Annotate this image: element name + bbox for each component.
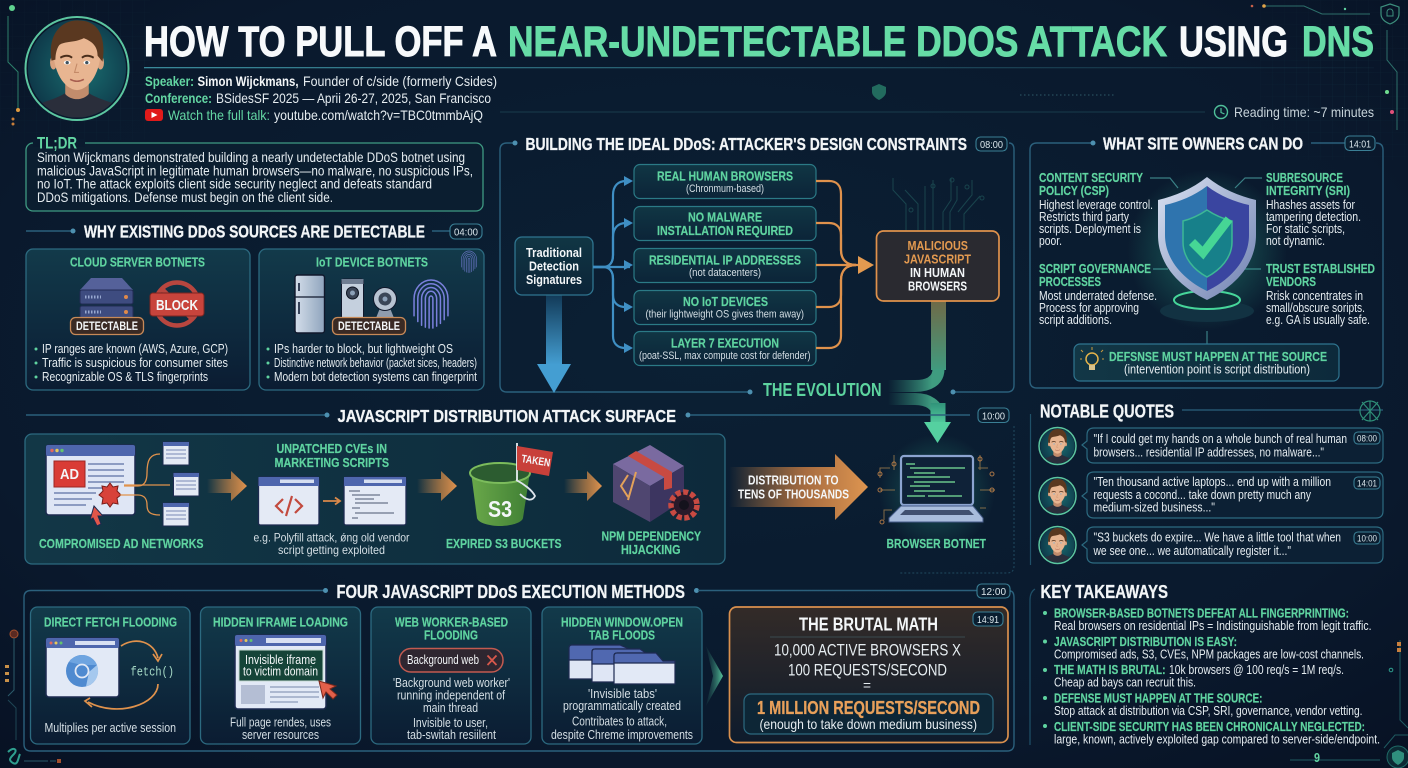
bullet list <box>266 342 477 384</box>
panel: IoT device botnets: IoT DEVICE BOTNETS <box>316 254 428 270</box>
item: SRI: For static scripts, <box>1266 222 1345 236</box>
icon: webcam <box>374 288 396 318</box>
item: script governance: PROCESSES <box>1039 274 1101 289</box>
fetch call label: fetch() <box>130 664 174 680</box>
panel: the brutal math: = <box>863 677 871 693</box>
item: CSP: scripts. Deployment is <box>1039 222 1141 236</box>
icon: quotes badge <box>1360 401 1380 421</box>
card: web worker-based flooding: tab-switah resiilent <box>407 728 496 742</box>
label: unpatched CVEs: UNPATCHED CVEs IN <box>276 441 387 456</box>
heading: javascript distribution attack surface <box>26 406 1009 426</box>
box: traditional detection signatures: Traditional <box>526 245 582 260</box>
box: layer 7: (poat-SSL, max compute cost for defender) <box>639 350 810 362</box>
icon: browser with iframe <box>235 635 337 709</box>
item: trust vendors: e.g. GA is usually safe. <box>1266 313 1370 327</box>
box: malicious javascript: IN HUMAN <box>910 265 965 280</box>
speaker avatar <box>26 17 128 120</box>
takeaway 2 <box>1054 634 1364 662</box>
quote 1: 08:00 <box>1357 434 1377 444</box>
takeaway 3: THE MATH IS BRUTAL: <box>1054 662 1166 677</box>
label: unpatched CVEs: MARKETING SCRIPTS <box>274 455 389 470</box>
panel: cloud server botnets <box>26 249 250 390</box>
item: SRI: tampering detection. <box>1266 210 1361 224</box>
speaker info: Watch the full talk: <box>168 107 270 123</box>
box: traditional detection signatures <box>515 237 593 295</box>
quote 2: "Ten thousand active laptops... end up with a million <box>1094 475 1331 489</box>
speaker info: Conference: <box>145 90 212 106</box>
icon: block sign: BLOCK <box>156 297 198 314</box>
card: hidden window.open tab floods: 'Invisible tabs' <box>588 687 657 701</box>
item: CSP <box>1039 170 1153 248</box>
heading: design constraints: 08:00 <box>980 139 1003 151</box>
box: real human browsers: REAL HUMAN BROWSERS <box>657 168 793 184</box>
decoration: top-right grid <box>1284 24 1404 132</box>
reading time: Reading time: ~7 minutes <box>1234 104 1374 120</box>
decoration: top-left grid <box>24 12 144 120</box>
box: malicious javascript: JAVASCRIPT <box>904 252 971 266</box>
item: CSP: Highest leverage control. <box>1039 198 1153 212</box>
icon: ad browser: AD <box>60 466 79 483</box>
item: SRI: INTEGRITY (SRI) <box>1266 183 1350 198</box>
decoration: header center shield and rules <box>500 84 1205 112</box>
section frame: right edge <box>900 426 1014 573</box>
box: no malware: INSTALLATION REQUIRED <box>657 223 793 238</box>
section frame right side <box>953 143 1014 392</box>
icon: stacked tabs <box>569 645 675 684</box>
card: web worker-based flooding: main thread <box>423 701 478 715</box>
speaker info: youtube.com/watch?v=TBC0tmmbAjQ <box>274 107 483 123</box>
panel: cloud server botnets: CLOUD SERVER BOTNETS <box>70 254 205 270</box>
card: web worker-based flooding: FLOODING <box>424 628 478 642</box>
box: residential IP: RESIDENTIAL IP ADDRESSES <box>649 252 801 268</box>
card: hidden window.open tab floods: TAB FLOODS <box>589 628 655 642</box>
connector lines <box>1150 178 1262 344</box>
icon: S3 bucket <box>470 443 553 526</box>
panel: TL;DR: malicious JavaScript in legitimate human browsers—no malware, no suspicious IPs, <box>37 164 473 178</box>
item: script governance: Process for approving <box>1039 301 1139 315</box>
quote 1: browsers... residential IP addresses, no malware..." <box>1094 446 1324 460</box>
quote 3 <box>1039 526 1383 564</box>
bullet list <box>34 342 228 384</box>
box: malicious javascript <box>876 231 999 301</box>
title underline <box>144 67 1374 68</box>
shield glow <box>1127 170 1287 330</box>
box: real human browsers <box>634 164 816 198</box>
decoration: top-right circuit <box>1251 4 1399 130</box>
label: npm hijacking <box>602 528 701 557</box>
card: hidden window.open tab floods: Contribates to attack, <box>572 714 667 728</box>
panel: what site owners can do <box>1030 134 1383 388</box>
box: malicious javascript: BROWSERS <box>908 278 967 294</box>
panel: notable quotes: NOTABLE QUOTES <box>1040 400 1174 422</box>
arrow: step 2 <box>417 471 457 501</box>
callout: defense at the source: DEFSNSE MUST HAPPEN AT THE SOURCE <box>1109 349 1327 364</box>
icon: browser with iframe: Invisible iframe <box>245 653 316 667</box>
title: USING <box>1179 18 1288 66</box>
callout: defense at the source <box>1074 344 1339 381</box>
speaker info <box>145 73 497 123</box>
callout: defense at the source: (intervention point is script distribution) <box>1124 362 1310 376</box>
panel: TL;DR: no IoT. The attack exploits client side security neglect and defeats standard <box>37 176 432 192</box>
panel: IoT device botnets <box>259 249 484 390</box>
quote 2 <box>1039 472 1383 518</box>
arrow: distribution to tens of thousands: TENS OF THOUSANDS <box>738 486 849 502</box>
panel: attack surface <box>25 434 725 564</box>
item: script governance <box>1039 261 1157 327</box>
icon: browser botnet laptop <box>878 434 995 550</box>
item: SRI: Hhashes assets for <box>1266 198 1355 212</box>
icon: shield <box>1158 177 1256 300</box>
arrow: fetch return <box>85 684 158 709</box>
icon: light bulb <box>1080 347 1104 370</box>
section frame: design constraints <box>500 143 750 392</box>
panel: the brutal math: 14:91 <box>977 614 999 626</box>
takeaway 3 <box>1054 662 1344 690</box>
label: expired S3 buckets: EXPIRED S3 BUCKETS <box>446 536 562 551</box>
quote 3: "S3 buckets do expire... We have a little tool that when <box>1094 530 1341 544</box>
icon: server <box>80 278 133 319</box>
box: no IoT: (their lightweight OS gives them away) <box>646 308 804 320</box>
box: real human browsers: (Chronmum-based) <box>686 183 764 195</box>
arrow: chevron to math <box>706 646 723 706</box>
badge: detectable: DETECTABLE <box>338 321 400 333</box>
panel: what site owners can do: WHAT SITE OWNERS CAN DO <box>1103 134 1303 154</box>
item: script governance: Most underrated defense. <box>1039 289 1157 303</box>
quote 1 <box>1039 428 1383 464</box>
box: residential IP: (not datacenters) <box>689 267 761 279</box>
arrows: orange merges <box>816 181 874 348</box>
item: SRI <box>1266 170 1361 248</box>
item: script governance: SCRIPT GOVERNANCE <box>1039 261 1151 276</box>
icon: smart speaker <box>342 279 364 319</box>
icon: document 1 <box>163 442 189 465</box>
arrow: small <box>323 498 340 504</box>
icon: mini browser script <box>344 477 406 525</box>
card: web worker-based flooding: running independent of <box>397 688 505 702</box>
label: compromised ad networks: COMPROMISED AD NETWORKS <box>39 536 204 551</box>
panel: TL;DR: DDoS mitigations. Defense must begin on the client side. <box>37 190 333 205</box>
panel: key takeaways <box>1030 581 1380 746</box>
background web pill: Background web <box>407 653 479 667</box>
label: polyfill note: script getting exploited <box>278 543 385 557</box>
quote 2: 14:01 <box>1357 478 1377 490</box>
arrow: distribution to tens of thousands: DISTRIBUTION TO <box>748 472 838 488</box>
arrow: step 1 <box>207 471 247 501</box>
item: SRI: not dynamic. <box>1266 234 1325 248</box>
takeaway 3: 10k browsers @ 100 req/s = 1M req/s. <box>1169 663 1344 677</box>
box: no IoT <box>634 290 816 324</box>
box: layer 7 <box>634 332 816 366</box>
panel: the brutal math: THE BRUTAL MATH <box>799 614 938 634</box>
quote 2: requests a cocond... take down pretty much any <box>1094 488 1312 502</box>
label: npm hijacking: HIJACKING <box>621 542 680 557</box>
bullet list: IPs harder to block, but lightweight OS <box>274 342 453 356</box>
card: hidden iframe loading: Full page rendes, uses <box>230 716 331 730</box>
arrow: fetch out <box>121 641 162 661</box>
icon: browser with chrome <box>46 638 119 697</box>
box: no malware: NO MALWARE <box>688 210 762 224</box>
decoration: bottom-right circuit <box>1290 640 1408 768</box>
bullet list: Traffic is suspicious for consumer sites <box>42 356 228 370</box>
item: CSP: poor. <box>1039 234 1062 248</box>
takeaway 3: Cheap ad bays can recruit this. <box>1054 676 1196 690</box>
quote 2: medium-sized business..." <box>1094 500 1215 514</box>
item: trust vendors <box>1266 261 1375 327</box>
result box: (enough to take down medium business) <box>760 716 977 732</box>
panel: key takeaways: KEY TAKEAWAYS <box>1040 581 1168 602</box>
heading: four javascript ddos execution methods: FOUR JAVASCRIPT DDoS EXECUTION METHODS <box>336 582 685 602</box>
badge: detectable <box>332 318 406 334</box>
item: trust vendors: TRUST ESTABLISHED <box>1266 261 1375 276</box>
icon: small fingerprint <box>461 251 477 273</box>
bullet list: Distinctive network behavior (packet sices, headers) <box>274 356 477 370</box>
heading: why existing sources: WHY EXISTING DDoS SOURCES ARE DETECTABLE <box>84 222 425 242</box>
card: direct fetch flooding: DIRECT FETCH FLOODING <box>44 614 177 630</box>
icon: youtube <box>145 109 163 121</box>
icon: browser with iframe: to victim domain <box>243 664 318 678</box>
card: direct fetch flooding: Multiplies per active session <box>44 721 176 735</box>
arrow: distribution to tens of thousands <box>729 454 868 520</box>
heading: javascript distribution attack surface: JAVASCRIPT DISTRIBUTION ATTACK SURFACE <box>338 406 676 426</box>
panel: the brutal math: 10,000 ACTIVE BROWSERS X <box>774 640 961 660</box>
panel: notable quotes <box>1030 400 1383 565</box>
heading: four javascript ddos execution methods: 12:00 <box>981 586 1006 598</box>
title: DNS <box>1302 18 1374 66</box>
heading: design constraints: BUILDING THE IDEAL DDoS: ATTACKER'S DESIGN CONSTRAINTS <box>526 134 967 154</box>
title <box>144 18 1374 66</box>
panel: the brutal math <box>730 607 1008 742</box>
icon: npm box <box>613 445 697 522</box>
label: polyfill note: e.g. Polyfill attack, ǿng old vendor <box>254 530 410 544</box>
item: trust vendors: Rrisk concentrates in <box>1266 289 1363 303</box>
takeaway 2: JAVASCRIPT DISTRIBUTION IS EASY: <box>1054 634 1237 649</box>
result box <box>744 694 993 734</box>
panel: the brutal math: 100 REQUESTS/SECOND <box>788 660 947 680</box>
box: traditional detection signatures: Detection <box>529 258 579 274</box>
decoration: bottom-right circuit: 9 <box>1314 751 1320 765</box>
card: hidden window.open tab floods: despite Chreme improvements <box>551 728 693 742</box>
label: browser botnet: BROWSER BOTNET <box>886 536 986 551</box>
item: trust vendors: small/obscure soripts. <box>1266 301 1365 315</box>
background web pill <box>400 648 503 672</box>
card: hidden window.open tab floods: HIDDEN WINDOW.OPEN <box>561 614 683 630</box>
card: hidden window.open tab floods: programmatically created <box>563 699 681 713</box>
takeaway 1 <box>1054 606 1372 633</box>
item: CSP: Restricts third party <box>1039 210 1130 224</box>
quote 3: 10:00 <box>1357 534 1377 544</box>
icon: document 3 <box>163 503 189 526</box>
item: trust vendors: VENDORS <box>1266 274 1316 289</box>
icon: document 2 <box>174 473 199 496</box>
heading: why existing sources: 04:00 <box>454 226 478 238</box>
card: hidden window.open tab floods <box>542 607 702 744</box>
card: web worker-based flooding: 'Background web worker' <box>393 676 510 690</box>
quote 3: we see one... we automatically register it..." <box>1093 544 1291 558</box>
speaker info: Simon Wijckmans, <box>198 73 298 89</box>
heading: four javascript ddos execution methods <box>24 582 1014 751</box>
box: no malware <box>634 206 816 240</box>
card: hidden iframe loading <box>200 607 360 744</box>
panel: TL;DR <box>26 134 483 211</box>
card: hidden iframe loading: server resources <box>242 728 319 742</box>
heading: javascript distribution attack surface: 10:00 <box>982 410 1005 422</box>
card: direct fetch flooding <box>30 607 190 744</box>
speaker info: BSidesSF 2025 — Aprii 26-27, 2025, San Francisco <box>216 90 491 106</box>
icon: block sign <box>150 282 204 326</box>
speaker info: Speaker: <box>145 73 194 89</box>
result box: 1 MILLION REQUESTS/SECOND <box>757 697 980 718</box>
box: no IoT: NO IoT DEVICES <box>683 294 768 309</box>
takeaway 4 <box>1054 690 1362 718</box>
panel: TL;DR: Simon Wijckmans demonstrated building a nearly undetectable DDoS botnet using <box>37 150 465 165</box>
platform <box>1160 291 1254 322</box>
title: NEAR-UNDETECTABLE DDOS ATTACK <box>508 18 1167 66</box>
bullet list: IP ranges are known (AWS, Azure, GCP) <box>42 342 228 356</box>
quote 1: "If I could get my hands on a whole bunch of real human <box>1094 432 1347 446</box>
badge: detectable <box>70 318 144 334</box>
arrow: evolution trunk <box>888 300 951 443</box>
virus <box>99 483 121 507</box>
takeaway 5 <box>1054 719 1380 746</box>
bullet list: Modern bot detection systems can fingerprint <box>274 370 477 384</box>
icon: fridge <box>295 275 324 333</box>
card: web worker-based flooding: Invisible to user, <box>413 716 488 730</box>
bullet list: Recognizable OS & TLS fingerprints <box>42 370 208 384</box>
title: HOW TO PULL OFF A <box>144 18 497 66</box>
decoration: circuit above malicious box <box>893 178 984 231</box>
label: polyfill note <box>254 530 410 557</box>
box: traditional detection signatures: Signatures <box>526 272 582 287</box>
decoration: bottom-left icons <box>5 630 61 764</box>
heading: the evolution: THE EVOLUTION <box>763 379 882 400</box>
icon: ad browser <box>46 445 135 526</box>
item: SRI: SUBRESOURCE <box>1266 170 1343 185</box>
icon: S3 bucket: S3 <box>488 496 512 522</box>
badge: detectable: DETECTABLE <box>76 321 138 333</box>
card: hidden iframe loading: HIDDEN IFRAME LOADING <box>213 614 348 630</box>
decoration: top-left circuit <box>8 5 20 126</box>
box: malicious javascript: MALICIOUS <box>908 238 968 253</box>
panel: TL;DR: TL;DR <box>37 134 77 152</box>
takeaway 4: DEFENSE MUST HAPPEN AT THE SOURCE: <box>1054 690 1262 706</box>
arrows: ad to docs <box>120 454 170 515</box>
item: CSP: POLICY (CSP) <box>1039 183 1109 198</box>
arrow: blue downward <box>537 295 571 393</box>
frame nodes <box>512 140 956 394</box>
card: web worker-based flooding: WEB WORKER-BASED <box>395 614 508 630</box>
arrow: step 3 <box>564 471 602 501</box>
label: unpatched CVEs <box>274 441 389 470</box>
arrows: blue branches <box>593 176 633 353</box>
panel: what site owners can do: 14:01 <box>1349 138 1371 150</box>
item: CSP: CONTENT SECURITY <box>1039 170 1143 185</box>
item: script governance: script additions. <box>1039 313 1112 327</box>
box: residential IP <box>634 248 816 282</box>
icon: S3 bucket: TAKEN <box>521 453 551 470</box>
icon: fingerprint <box>414 280 448 328</box>
icon: mini browser code <box>258 477 319 525</box>
box: layer 7: LAYER 7 EXECUTION <box>671 336 779 350</box>
speaker info: Founder of c/side (formerly Csides) <box>303 73 497 89</box>
card: web worker-based flooding <box>371 607 531 744</box>
label: npm hijacking: NPM DEPENDENCY <box>602 528 701 544</box>
